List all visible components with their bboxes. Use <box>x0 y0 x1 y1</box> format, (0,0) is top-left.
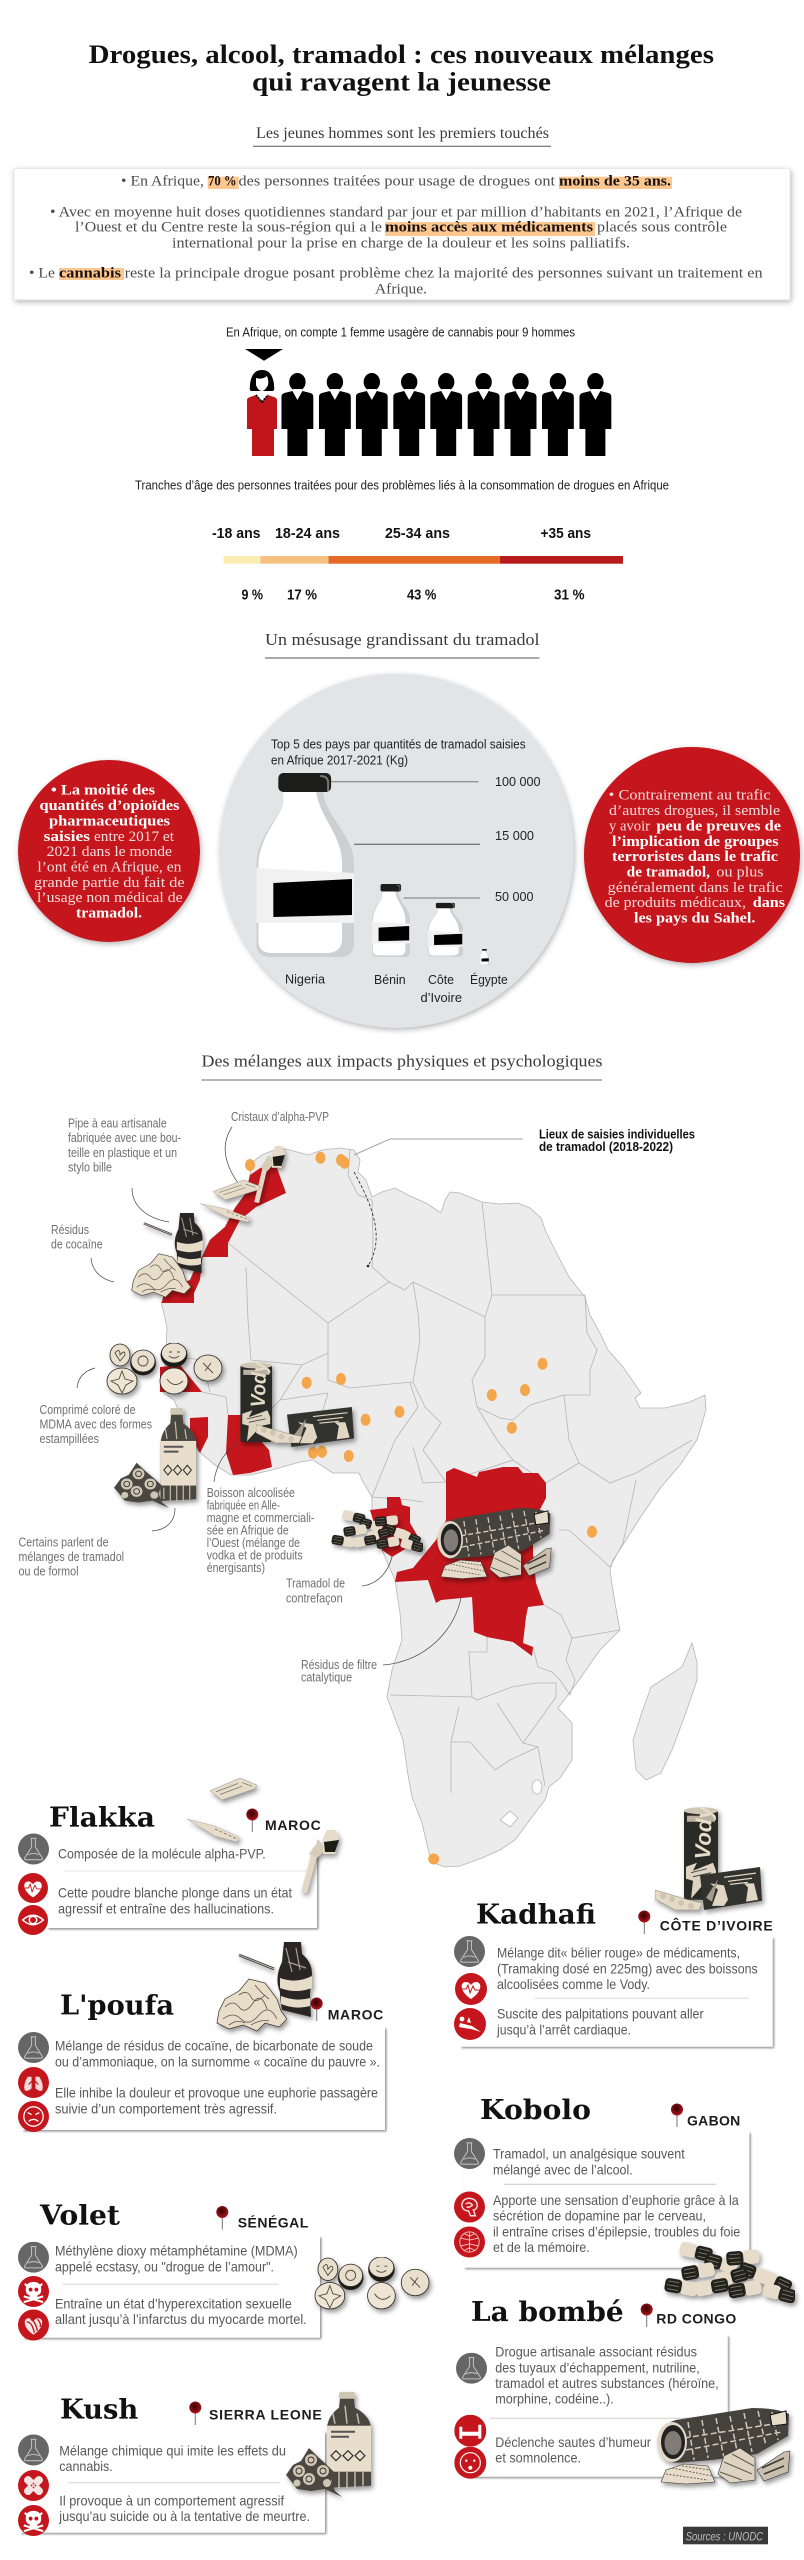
map annotations: fabriquée avec une bou- <box>68 1131 181 1145</box>
card: La bombé: et somnolence. <box>495 2450 581 2466</box>
illustration: MDMA pills <box>315 2257 429 2309</box>
icon: heart <box>455 1973 487 2005</box>
card: Volet: Entraîne un état d’hyperexcitation sexuelle <box>55 2295 292 2311</box>
illustration: capsules <box>664 2241 797 2304</box>
bottle: Côte d'Ivoire <box>428 903 463 957</box>
panel: key facts: moins de 35 ans. <box>559 174 671 190</box>
illustration: catalytic filter <box>657 2408 790 2484</box>
card: Kush <box>18 2392 371 2536</box>
icon: head <box>454 2192 485 2222</box>
map annotations: Pipe à eau artisanale <box>68 1116 167 1130</box>
map annotations: MDMA avec des formes <box>40 1418 152 1432</box>
panel: left red circle: • La moitié des <box>51 783 155 799</box>
card: Flakka: MAROC <box>265 1817 321 1833</box>
card: Kadhafi: Kadhafi <box>476 1899 596 1930</box>
card: La bombé: tramadol et autres substances (héroïne, <box>495 2375 719 2391</box>
panel: key facts: • En Afrique, <box>121 174 204 190</box>
card: Kush: cannabis. <box>59 2458 113 2474</box>
panel: left red circle: saisies <box>44 829 90 845</box>
chart: age bar: 18-24 ans <box>275 525 340 542</box>
map annotations: l’Ouest (mélange de <box>207 1536 300 1550</box>
card: Volet: appelé ecstasy, ou "drogue de l’amour". <box>55 2258 274 2274</box>
map annotations: de tramadol (2018-2022) <box>539 1139 673 1154</box>
card: L'poufa <box>18 1942 385 2132</box>
icon: bandage <box>18 2470 49 2501</box>
panel: key facts: 70 % <box>208 174 236 190</box>
panel: left red circle <box>18 760 200 942</box>
card: Kobolo <box>454 2095 797 2304</box>
panel: right red circle: généralement dans le trafic <box>608 880 783 896</box>
icon: flask <box>18 1834 49 1864</box>
icon: face <box>454 2447 486 2479</box>
card: L'poufa: MAROC <box>328 2006 383 2022</box>
icon: brain <box>454 2226 485 2258</box>
region: Gabon <box>370 1497 420 1557</box>
card: Flakka: Composée de la molécule alpha-PVP. <box>58 1845 266 1861</box>
region: Sénégal <box>160 1365 202 1392</box>
panel: left red circle: l’usage non médical de <box>37 890 183 906</box>
card: Kobolo: GABON <box>687 2113 740 2129</box>
bottle: Bénin <box>372 884 410 957</box>
panel: key facts: des personnes traitées pour usage de drogues ont <box>238 174 555 190</box>
panel: left red circle: 2021 dans le monde <box>47 844 172 860</box>
heading: les jeunes hommes: Les jeunes hommes sont les premiers touchés <box>256 125 549 142</box>
panel: key facts: • Le <box>29 266 55 282</box>
card: Kobolo: Apporte une sensation d’euphorie grâce à la <box>493 2192 739 2208</box>
card: Kadhafi: Mélange dit« bélier rouge» de médicaments, <box>497 1945 740 1961</box>
title: qui ravagent la jeunesse <box>252 68 551 97</box>
card: Kobolo: Tramadol, un analgésique souvent <box>493 2146 685 2162</box>
card: La bombé: RD CONGO <box>656 2310 736 2326</box>
panel: left red circle: pharmaceutiques <box>49 813 170 829</box>
caption: age brackets: Tranches d’âge des personnes traitées pour des problèmes liés à la consommation de drogues en Afrique <box>135 477 669 492</box>
card: Volet: Volet <box>39 2200 121 2231</box>
map annotations: Cristaux d’alpha-PVP <box>231 1110 329 1124</box>
title <box>89 40 714 97</box>
card: Volet: allant jusqu’à l’infarctus du myocarde mortel. <box>55 2311 307 2327</box>
illustration: alpha-PVP <box>200 1146 285 1222</box>
map annotations: contrefaçon <box>286 1592 343 1606</box>
panel: key facts: • Avec en moyenne huit doses quotidiennes standard par jour et par million d’habitants en 2021, l’Afrique de <box>50 205 742 221</box>
panel: left red circle: grande partie du fait de <box>34 875 185 891</box>
map annotations: vodka et de produits <box>207 1549 303 1563</box>
region: Sierra Leone <box>190 1417 208 1453</box>
source note: Sources : UNODC <box>686 2530 763 2544</box>
card: Kobolo: il entraîne crises d’épilepsie, troubles du foie <box>493 2223 740 2239</box>
card: Flakka: agressif et entraîne des hallucinations. <box>58 1900 274 1916</box>
illustration: catalytic filter <box>437 1508 551 1579</box>
card: Kobolo: et de la mémoire. <box>493 2239 590 2255</box>
panel: key facts: cannabis <box>59 266 121 282</box>
card: Kadhafi <box>454 1804 773 2047</box>
illustration: pipe and residue <box>132 1213 203 1297</box>
seizure sites <box>245 1152 597 1864</box>
card: L'poufa: Mélange de résidus de cocaïne, de bicarbonate de soude <box>55 2038 373 2054</box>
panel: bottle chart: Bénin <box>374 972 406 987</box>
chart: age bar: 31 % <box>554 586 585 603</box>
illustration: Vody and Tramaking <box>655 1804 762 1910</box>
icon: flask <box>456 2353 487 2384</box>
panel: bottle chart: 15 000 <box>495 828 534 843</box>
panel: bottle chart <box>220 674 574 1028</box>
card: L'poufa: ou d’ammoniaque, on la surnomme « cocaïne du pauvre ». <box>55 2054 380 2070</box>
map annotations: sée en Afrique de <box>207 1524 289 1538</box>
map annotations: stylo bille <box>68 1161 112 1175</box>
panel: right red circle: ou plus <box>716 864 764 880</box>
icon: eye <box>18 1905 48 1935</box>
card: L'poufa: suivie d’un comportement très agressif. <box>55 2100 277 2116</box>
card: Kobolo: sécrétion de dopamine par le cerveau, <box>493 2208 706 2224</box>
illustration: capsules <box>331 1510 425 1553</box>
illustration: kush <box>286 2392 371 2497</box>
panel: key facts: reste la principale drogue posant problème chez la majorité des personnes suivant un traitement en <box>125 266 763 282</box>
card: Flakka: Cette poudre blanche plonge dans un état <box>58 1884 292 1900</box>
chart: age bar: -18 ans <box>212 525 260 542</box>
panel: bottle chart: d’Ivoire <box>420 990 462 1005</box>
illustration: alpha-PVP <box>187 1778 339 1893</box>
panel: left red circle: tramadol. <box>76 906 142 922</box>
panel: bottle chart: Top 5 des pays par quantités de tramadol saisies <box>271 736 526 751</box>
panel: bottle chart: Égypte <box>470 972 508 987</box>
card: La bombé: La bombé <box>471 2297 624 2328</box>
card: La bombé: des tuyaux d’échappement, nutriline, <box>495 2359 700 2375</box>
illustration: Vody and Tramaking <box>240 1361 354 1447</box>
map annotations: Tramadol de <box>286 1577 345 1591</box>
title: Drogues, alcool, tramadol : ces nouveaux mélanges <box>89 40 714 69</box>
panel: key facts: Afrique. <box>375 281 427 297</box>
panel: right red circle: y avoir <box>609 818 650 834</box>
illustration: pipe and residue <box>217 1942 312 2031</box>
panel: right red circle: l’implication de groupes <box>612 834 779 850</box>
panel: right red circle: • Contrairement au trafic <box>609 788 771 804</box>
map annotations: Résidus de filtre <box>301 1658 377 1672</box>
panel: key facts: international pour la prise en charge de la douleur et les soins palliatifs. <box>172 235 630 251</box>
panel: right red circle: de tramadol, <box>627 864 710 880</box>
panel: key facts: l’Ouest et du Centre reste la sous-région qui a le <box>75 220 382 236</box>
panel: left red circle: l’ont été en Afrique, en <box>37 860 182 876</box>
panel: key facts: placés sous contrôle <box>597 220 727 236</box>
icon: lungs <box>18 2067 49 2098</box>
map annotations: mélanges de tramadol <box>18 1550 124 1564</box>
icon: skull <box>18 2505 49 2536</box>
card: Kadhafi: (Tramaking dosé en 225mg) avec des boissons <box>497 1960 758 1976</box>
card: Flakka: Flakka <box>49 1803 155 1834</box>
map annotations: fabriquée en Alle- <box>207 1498 280 1512</box>
chart: age bar: 25-34 ans <box>385 525 450 542</box>
region: Côte d'Ivoire <box>226 1415 272 1475</box>
panel: left red circle: quantités d’opioïdes <box>40 798 180 814</box>
icon: collapse <box>454 2008 486 2040</box>
card: Kush: Kush <box>60 2394 139 2425</box>
card: Kush: SIERRA LEONE <box>209 2406 322 2422</box>
icon: skull <box>18 2276 49 2307</box>
icon: flask <box>18 2032 49 2063</box>
card: La bombé: Drogue artisanale associant résidus <box>495 2344 697 2360</box>
panel: key facts <box>14 169 790 300</box>
panel: right red circle: dans <box>753 895 785 911</box>
card: La bombé <box>454 2297 790 2484</box>
icon: flask <box>454 2138 485 2169</box>
card: La bombé: morphine, codéine..). <box>495 2391 614 2407</box>
illustration: MDMA pills <box>107 1343 222 1394</box>
map annotations: énergisants) <box>207 1561 265 1575</box>
bottle: Nigeria <box>256 773 354 957</box>
map annotations: de cocaïne <box>51 1238 103 1252</box>
panel: right red circle: d’autres drogues, il semble <box>609 803 780 819</box>
caption: cannabis ratio: En Afrique, on compte 1 femme usagère de cannabis pour 9 hommes <box>226 325 575 340</box>
icon: striped heart <box>18 2310 49 2340</box>
card: Flakka <box>18 1778 339 1935</box>
icon: bed <box>454 2415 486 2447</box>
source note <box>683 2527 768 2544</box>
card: Volet: SÉNÉGAL <box>238 2215 309 2231</box>
map annotations <box>18 1110 695 1685</box>
panel: key facts: moins accès aux médicaments <box>385 220 593 236</box>
card: Volet: Méthylène dioxy métamphétamine (MDMA) <box>55 2243 298 2259</box>
chart: age bar: +35 ans <box>540 525 591 542</box>
icon: flask <box>18 2242 49 2273</box>
panel: right red circle: les pays du Sahel. <box>634 910 755 926</box>
icon: angry face <box>18 2101 49 2132</box>
pictogram: 1 woman for 9 men <box>245 349 611 456</box>
chart: age bar: 43 % <box>407 586 436 603</box>
card: Kadhafi: jusqu’à l’arrêt cardiaque. <box>496 2021 631 2037</box>
card: Volet <box>18 2200 429 2340</box>
map annotations: estampillées <box>40 1432 99 1446</box>
map: Africa <box>160 1148 706 1867</box>
panel: right red circle: de produits médicaux, <box>605 895 746 911</box>
heading: tramadol: Un mésusage grandissant du tramadol <box>265 630 540 649</box>
card: Kush: jusqu’au suicide ou à la tentative de meurtre. <box>58 2508 310 2524</box>
map annotations: magne et commerciali- <box>207 1511 314 1525</box>
chart: age bar <box>212 525 623 603</box>
map annotations: ou de formol <box>18 1565 78 1579</box>
panel: left red circle: entre 2017 et <box>94 829 174 845</box>
card: Kobolo: Kobolo <box>480 2095 591 2126</box>
map annotations: Comprimé coloré de <box>40 1403 136 1417</box>
heading: mélanges: Des mélanges aux impacts physiques et psychologiques <box>202 1052 602 1071</box>
map annotations: Certains parlent de <box>18 1536 109 1550</box>
chart: age bar: 9 % <box>242 586 263 603</box>
card: Kush: Il provoque à un comportement agressif <box>59 2492 284 2508</box>
card: La bombé: Déclenche sautes d’humeur <box>495 2434 651 2450</box>
card: Kadhafi: Suscite des palpitations pouvant aller <box>497 2006 704 2022</box>
card: Kush: Mélange chimique qui imite les effets du <box>59 2442 286 2458</box>
map annotations: catalytique <box>301 1671 352 1685</box>
map annotations: teille en plastique et un <box>68 1146 177 1160</box>
panel: right red circle: peu de preuves de <box>656 818 782 834</box>
panel: bottle chart: 50 000 <box>495 889 534 904</box>
map annotations: Boisson alcoolisée <box>207 1486 295 1500</box>
card: Kadhafi: alcoolisées comme le Vody. <box>497 1976 650 1992</box>
card: Kadhafi: CÔTE D’IVOIRE <box>660 1917 773 1934</box>
panel: bottle chart: en Afrique 2017-2021 (Kg) <box>271 752 408 767</box>
panel: bottle chart: 100 000 <box>495 774 540 789</box>
panel: bottle chart: Côte <box>428 972 454 987</box>
card: Kobolo: mélangé avec de l’alcool. <box>493 2161 633 2177</box>
bottle: Égypte <box>480 949 489 965</box>
icon: flask <box>454 1936 485 1967</box>
map annotations: Résidus <box>51 1223 89 1237</box>
region: RD Congo <box>395 1467 546 1656</box>
chart: age bar: 17 % <box>287 586 317 603</box>
panel: right red circle <box>584 747 800 963</box>
illustration: kush <box>114 1408 196 1508</box>
card: L'poufa: Elle inhibe la douleur et provoque une euphorie passagère <box>55 2085 378 2101</box>
icon: heart <box>18 1873 48 1903</box>
illustrations on the map <box>107 1146 551 1579</box>
card: L'poufa: L'poufa <box>60 1990 174 2021</box>
icon: flask <box>18 2434 49 2466</box>
map annotations: Lieux de saisies individuelles <box>539 1126 695 1141</box>
panel: bottle chart: Nigeria <box>285 971 326 986</box>
panel: right red circle: terroristes dans le trafic <box>612 849 779 865</box>
